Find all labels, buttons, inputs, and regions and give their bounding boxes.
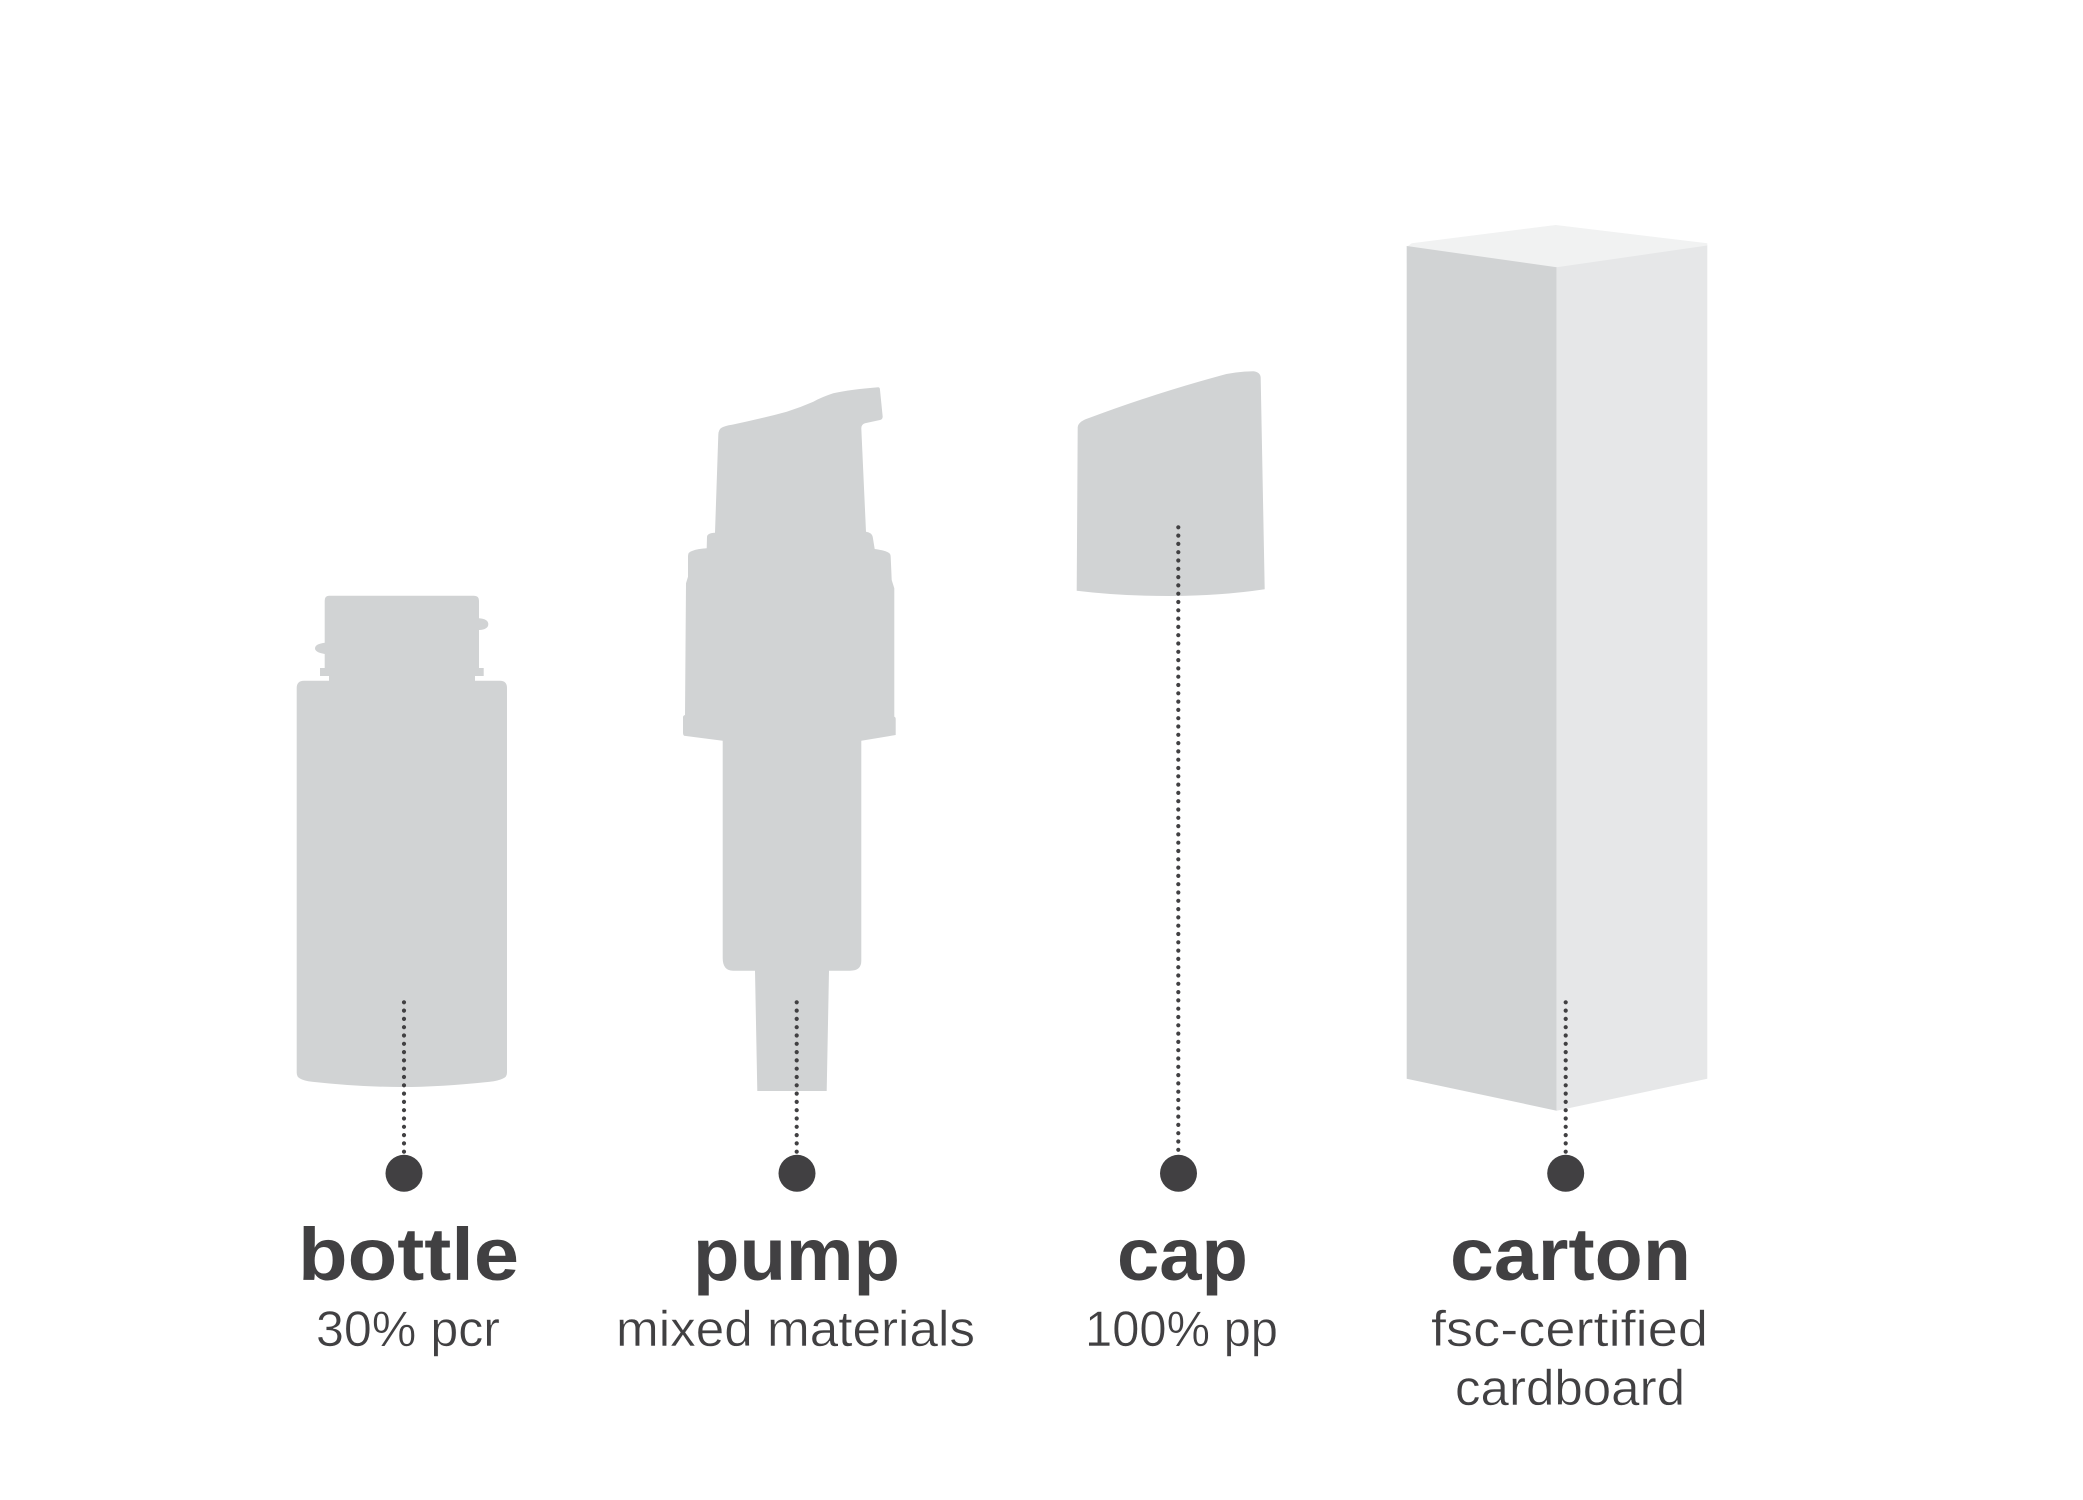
marker dot: cap [1160, 1155, 1197, 1192]
heading: bottle: bottle [298, 1213, 519, 1296]
leader line: bottle [402, 1002, 406, 1152]
leader line: cap [1176, 527, 1180, 1152]
sublabel: fsc-certified cardboard [1431, 1301, 1708, 1416]
icon: bottle silhouette [297, 596, 507, 1087]
sublabel: 100% pp: 100% pp [1085, 1301, 1278, 1357]
leader line: carton [1564, 1002, 1568, 1152]
marker dot: carton [1547, 1155, 1584, 1192]
icon: carton box [1407, 225, 1707, 1111]
sublabel: mixed materials: mixed materials [616, 1301, 975, 1357]
heading: cap: cap [1117, 1213, 1248, 1296]
icon: cap silhouette [1077, 371, 1265, 596]
marker dot: bottle [386, 1155, 422, 1192]
panel: carton [1407, 225, 1708, 1416]
sublabel: 30% pcr: 30% pcr [316, 1301, 500, 1357]
sublabel: fsc-certified cardboard: cardboard [1455, 1360, 1685, 1416]
heading: carton: carton [1450, 1213, 1691, 1296]
icon: pump silhouette [683, 387, 896, 1091]
leader line: pump [795, 1002, 799, 1152]
panel: bottle [297, 596, 519, 1357]
panel: pump [616, 387, 975, 1357]
sublabel: fsc-certified cardboard: fsc-certified [1431, 1301, 1708, 1357]
marker dot: pump [778, 1155, 816, 1192]
panel: cap [1077, 371, 1278, 1357]
heading: pump: pump [693, 1213, 900, 1296]
